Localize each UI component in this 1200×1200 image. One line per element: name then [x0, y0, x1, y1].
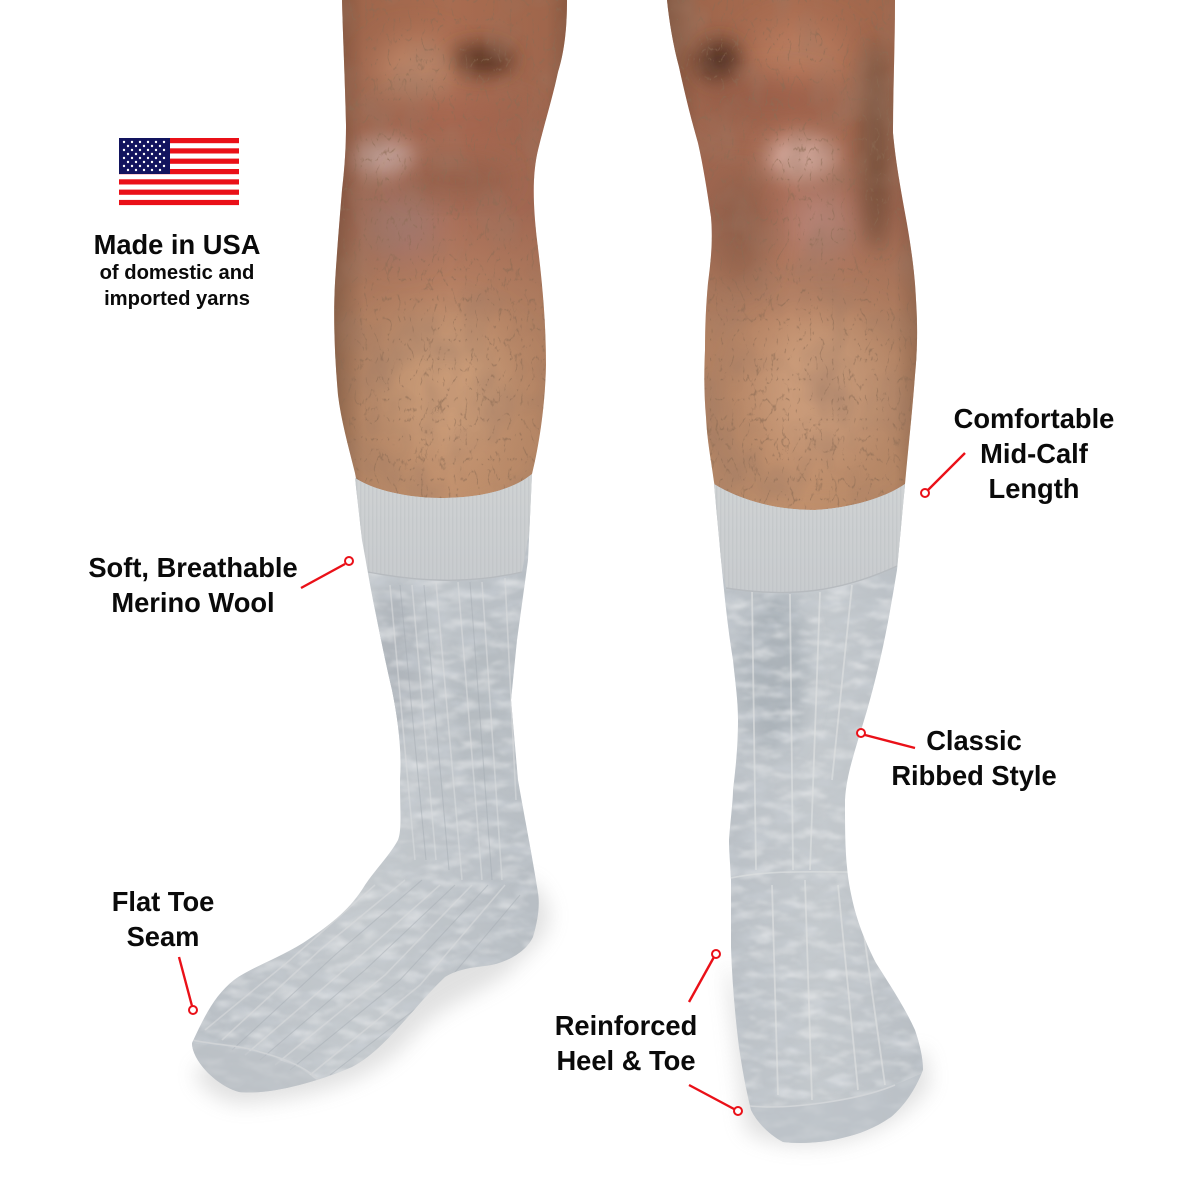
callout: comfortable mid-calf length: Mid-Calf: [980, 438, 1089, 469]
text block: Made in USA: imported yarns: [104, 288, 250, 310]
callout: flat toe seam: Flat Toe: [112, 886, 214, 917]
foot shadows: [195, 880, 930, 1145]
ribs: [205, 578, 516, 1075]
callout: flat toe seam: [112, 886, 214, 1014]
callout: soft breathable merino wool: Merino Wool: [111, 587, 275, 618]
right sock: [705, 480, 930, 1150]
callout: comfortable mid-calf length: Length: [989, 473, 1079, 504]
ribs: [731, 585, 885, 1100]
callout: reinforced heel and toe: Reinforced: [555, 1010, 697, 1041]
left sock: [185, 470, 545, 1100]
callout: soft breathable merino wool: [88, 552, 353, 618]
icon: US flag: [119, 138, 239, 205]
left leg: [330, 0, 570, 520]
right leg: [665, 0, 920, 530]
callout: classic ribbed style: Classic: [926, 725, 1022, 756]
callout: classic ribbed style: [857, 725, 1057, 791]
callout: soft breathable merino wool: Soft, Breathable: [88, 552, 298, 583]
text block: Made in USA: Made in USA: [94, 229, 260, 260]
cuff: [356, 474, 532, 580]
callout: classic ribbed style: Ribbed Style: [891, 760, 1057, 791]
callout: reinforced heel and toe: Heel & Toe: [556, 1045, 696, 1076]
callout: comfortable mid-calf length: Comfortable: [954, 403, 1114, 434]
text block: Made in USA: of domestic and: [100, 262, 254, 284]
callout: comfortable mid-calf length: [921, 403, 1114, 504]
toe: [192, 1044, 315, 1092]
callout: reinforced heel and toe: [555, 950, 742, 1115]
toe: [750, 1077, 918, 1143]
text block: Made in USA: [94, 229, 260, 310]
callout: flat toe seam: Seam: [127, 921, 199, 952]
cuff: [714, 484, 905, 590]
